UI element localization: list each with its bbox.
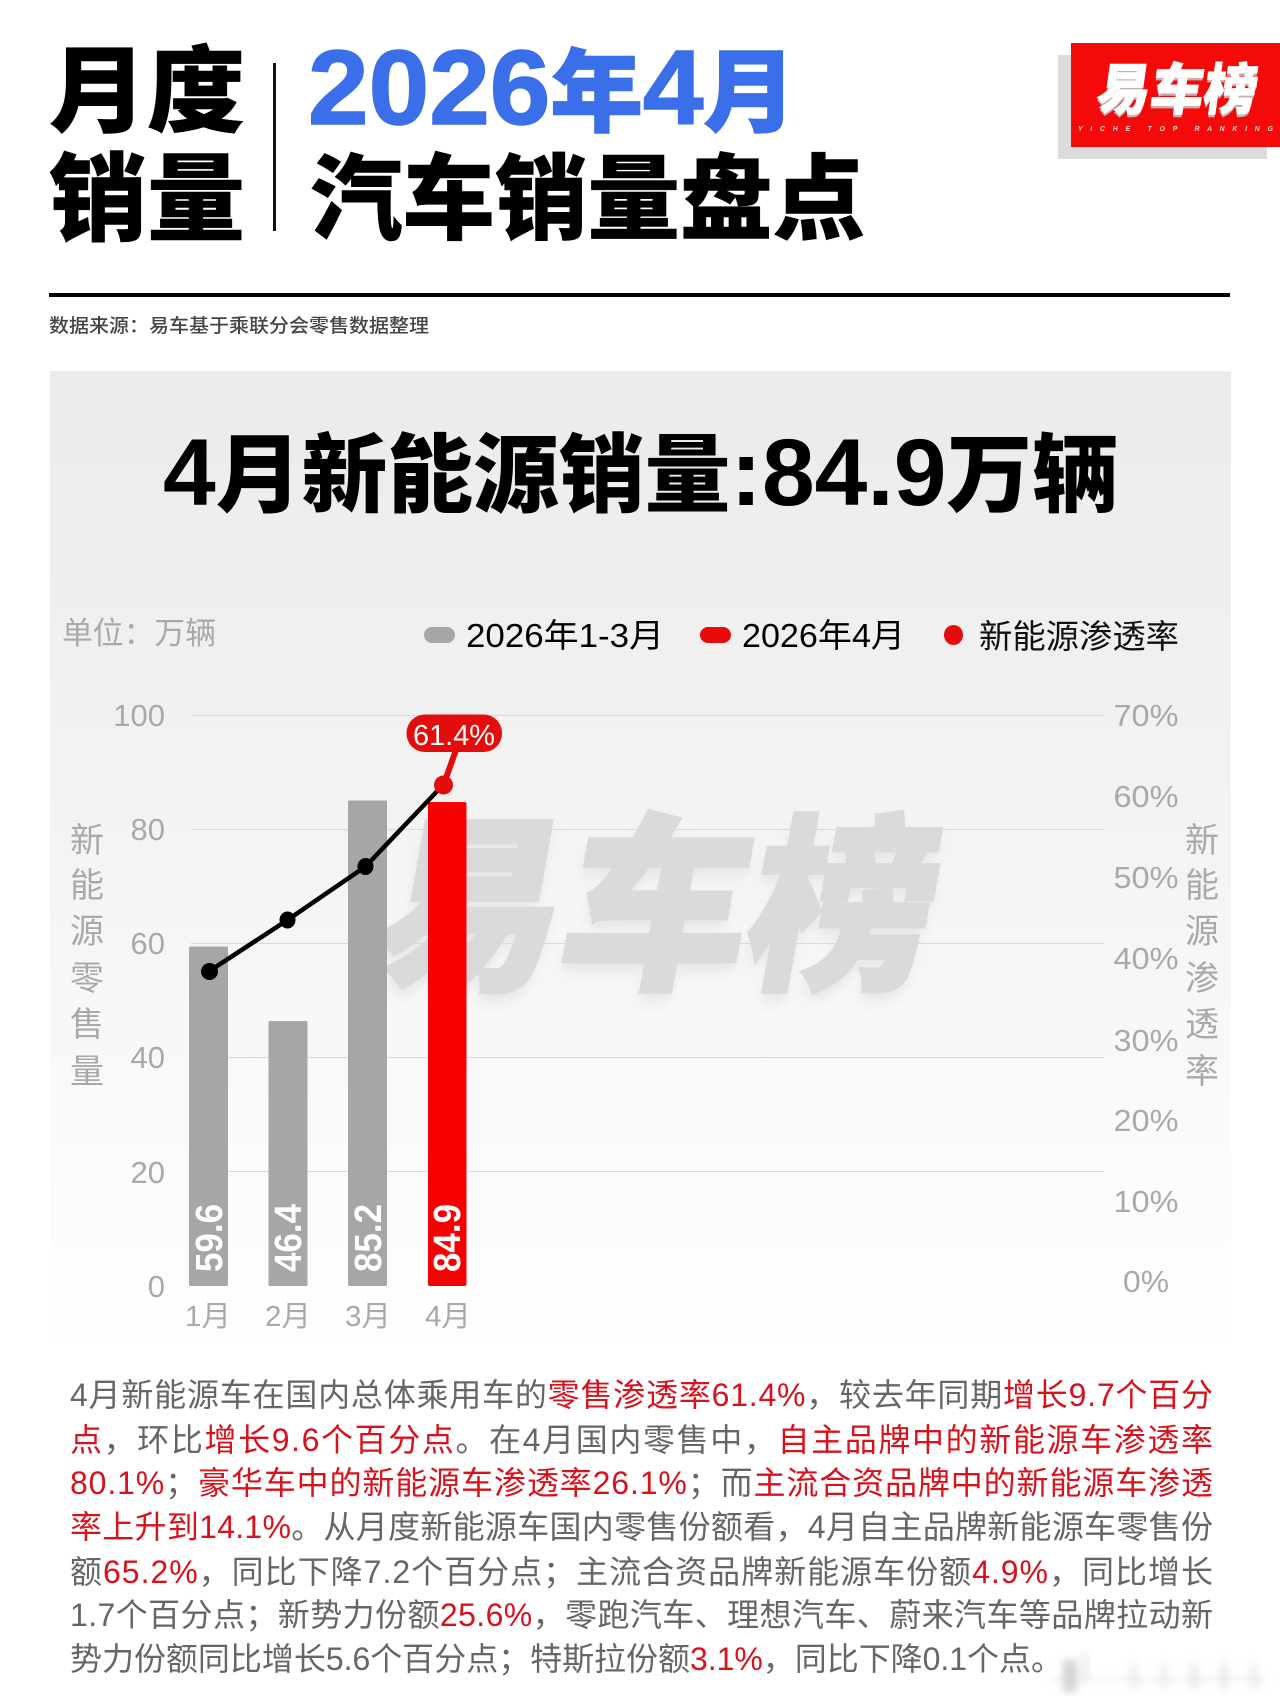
month labels: 1月 (185, 1301, 231, 1333)
left axis ticks: 100 (113, 698, 165, 733)
left axis ticks: 0 (148, 1269, 165, 1304)
left axis ticks: 40 (131, 1040, 165, 1075)
bars (189, 800, 466, 1286)
right axis title: 源 (1185, 913, 1219, 951)
title: 月度销量: 月度 (49, 39, 245, 144)
summary text: 80.1%；豪华车中的新能源车渗透率26.1%；而主流合资品牌中的新能源车渗透 (70, 1465, 1213, 1501)
left axis ticks (113, 698, 165, 1304)
right axis ticks: 30% (1114, 1023, 1178, 1058)
left axis ticks: 80 (131, 812, 165, 847)
bar values: 84.9 (427, 1204, 469, 1272)
right axis ticks: 70% (1114, 698, 1178, 733)
left axis title: 源 (70, 913, 104, 951)
panel heading: 4月新能源销量:84.9万辆 (163, 420, 1118, 526)
faded source mark (1052, 1652, 1267, 1692)
legend: 2026年4月 (742, 617, 905, 654)
bar values (189, 1204, 469, 1272)
right axis ticks: 60% (1114, 779, 1178, 814)
left axis title: 能 (70, 867, 104, 905)
month labels (185, 1301, 471, 1333)
left axis title: 零 (70, 960, 104, 998)
summary text: 额65.2%，同比下降7.2个百分点；主流合资品牌新能源车份额4.9%，同比增长 (70, 1554, 1213, 1590)
left axis title: 量 (70, 1053, 104, 1091)
header rule (49, 293, 1230, 297)
right axis title: 能 (1185, 867, 1219, 905)
left axis ticks: 20 (131, 1155, 165, 1190)
watermark: 易车榜: 易车榜 (361, 804, 956, 1015)
title divider (273, 63, 276, 231)
chart: monthly sales and penetration (70, 698, 1219, 1333)
logo: 易车榜: 易车榜 (1093, 59, 1262, 121)
right axis ticks: 50% (1114, 860, 1178, 895)
summary text: 1.7个百分点；新势力份额25.6%，零跑汽车、理想汽车、蔚来汽车等品牌拉动新 (70, 1597, 1213, 1633)
data source: 数据来源：易车基于乘联分会零售数据整理 (49, 315, 429, 337)
watermark: 易车榜: 易车榜 (359, 814, 954, 1025)
left axis title: 售 (70, 1006, 104, 1044)
bar values: 59.6 (189, 1204, 231, 1272)
summary text: 率上升到14.1%。从月度新能源车国内零售份额看，4月自主品牌新能源车零售份 (70, 1509, 1213, 1545)
right axis ticks: 40% (1114, 941, 1178, 976)
unit label: 单位：万辆 (62, 616, 216, 651)
heading: 汽车销量盘点: 汽车销量盘点 (310, 148, 865, 252)
summary text: 4月新能源车在国内总体乘用车的零售渗透率61.4%，较去年同期增长9.7个百分 (70, 1377, 1213, 1413)
month labels: 2月 (265, 1301, 311, 1333)
penetration line (201, 750, 456, 980)
summary text: 点，环比增长9.6个百分点。在4月国内零售中，自主品牌中的新能源车渗透率 (70, 1422, 1213, 1458)
logo: 易车榜: Y I C H E T O P R A N K I N G (1078, 126, 1274, 133)
right axis ticks: 10% (1114, 1184, 1178, 1219)
month labels: 3月 (345, 1301, 391, 1333)
left axis ticks: 60 (131, 926, 165, 961)
summary text (70, 1377, 1213, 1677)
right axis ticks: 0% (1123, 1264, 1169, 1299)
heading: 2026年4月: 2026年4月 (308, 29, 796, 147)
left axis title (70, 822, 104, 1091)
bar values: 85.2 (348, 1204, 390, 1272)
right axis ticks: 20% (1114, 1103, 1178, 1138)
panel: chart background (50, 371, 1231, 1361)
summary text: 势力份额同比增长5.6个百分点；特斯拉份额3.1%，同比下降0.1个点。 (70, 1641, 1063, 1677)
right axis ticks (1114, 698, 1178, 1299)
right axis title: 透 (1185, 1006, 1219, 1044)
logo: 易车榜 (1058, 43, 1280, 159)
legend: 2026年1-3月 (466, 617, 664, 654)
right axis title: 渗 (1185, 960, 1219, 998)
logo: 易车榜: 易车榜 (1093, 62, 1262, 124)
bar values: 46.4 (268, 1204, 310, 1272)
right axis title: 率 (1185, 1053, 1219, 1091)
legend (424, 617, 1179, 655)
title: 月度销量 (49, 39, 245, 254)
month labels: 4月 (425, 1301, 471, 1333)
right axis title: 新 (1185, 822, 1219, 860)
left axis title: 新 (70, 822, 104, 860)
legend: 新能源渗透率 (979, 618, 1179, 655)
right axis title (1185, 822, 1219, 1091)
title: 月度销量: 销量 (49, 147, 245, 254)
callout: 61.4%: 61.4% (413, 720, 495, 752)
